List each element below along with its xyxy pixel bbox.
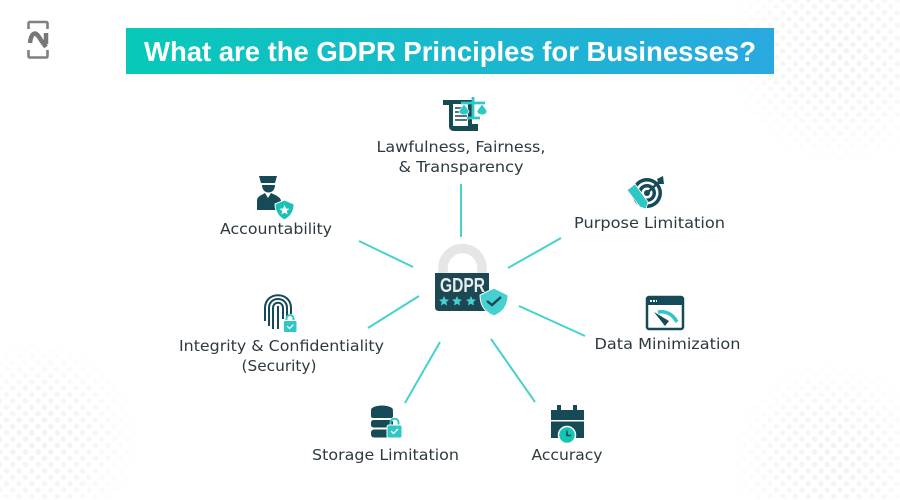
icon: browser gauge bbox=[647, 297, 683, 329]
connector lines bbox=[359, 184, 585, 403]
principle: storage limitation bbox=[312, 406, 459, 464]
principle: accuracy: Accuracy bbox=[532, 446, 603, 464]
icon: database and lock bbox=[371, 406, 402, 438]
principle: accountability: Accountability bbox=[220, 220, 332, 238]
logo bbox=[28, 22, 48, 58]
principle: lawfulness, fairness, transparency bbox=[376, 97, 546, 176]
principle: integrity and confidentiality: Integrity & Confidentiality bbox=[179, 337, 384, 355]
principle: integrity and confidentiality: (Security) bbox=[242, 357, 316, 375]
central padlock icon: GDPR bbox=[440, 274, 485, 297]
icon: calendar and clock bbox=[551, 405, 584, 444]
title banner bbox=[126, 28, 774, 74]
principle: data minimization: Data Minimization bbox=[594, 335, 740, 353]
principle: purpose limitation: Purpose Limitation bbox=[574, 214, 725, 232]
principle: lawfulness, fairness, transparency: & Transparency bbox=[398, 158, 524, 176]
central padlock icon bbox=[435, 249, 508, 316]
icon: target and pencil bbox=[627, 176, 664, 209]
principle: accuracy bbox=[532, 405, 603, 464]
principle: storage limitation: Storage Limitation bbox=[312, 446, 459, 464]
principle: lawfulness, fairness, transparency: Lawfulness, Fairness, bbox=[376, 138, 546, 156]
principle: purpose limitation bbox=[574, 176, 725, 232]
icon: officer with shield bbox=[257, 176, 294, 220]
icon: scroll and scales bbox=[443, 97, 487, 131]
principle: accountability bbox=[220, 176, 332, 238]
title banner: What are the GDPR Principles for Businesses? bbox=[144, 36, 756, 67]
icon: fingerprint and lock bbox=[265, 295, 297, 332]
principle: data minimization bbox=[594, 297, 740, 353]
principle: integrity and confidentiality bbox=[179, 295, 384, 375]
